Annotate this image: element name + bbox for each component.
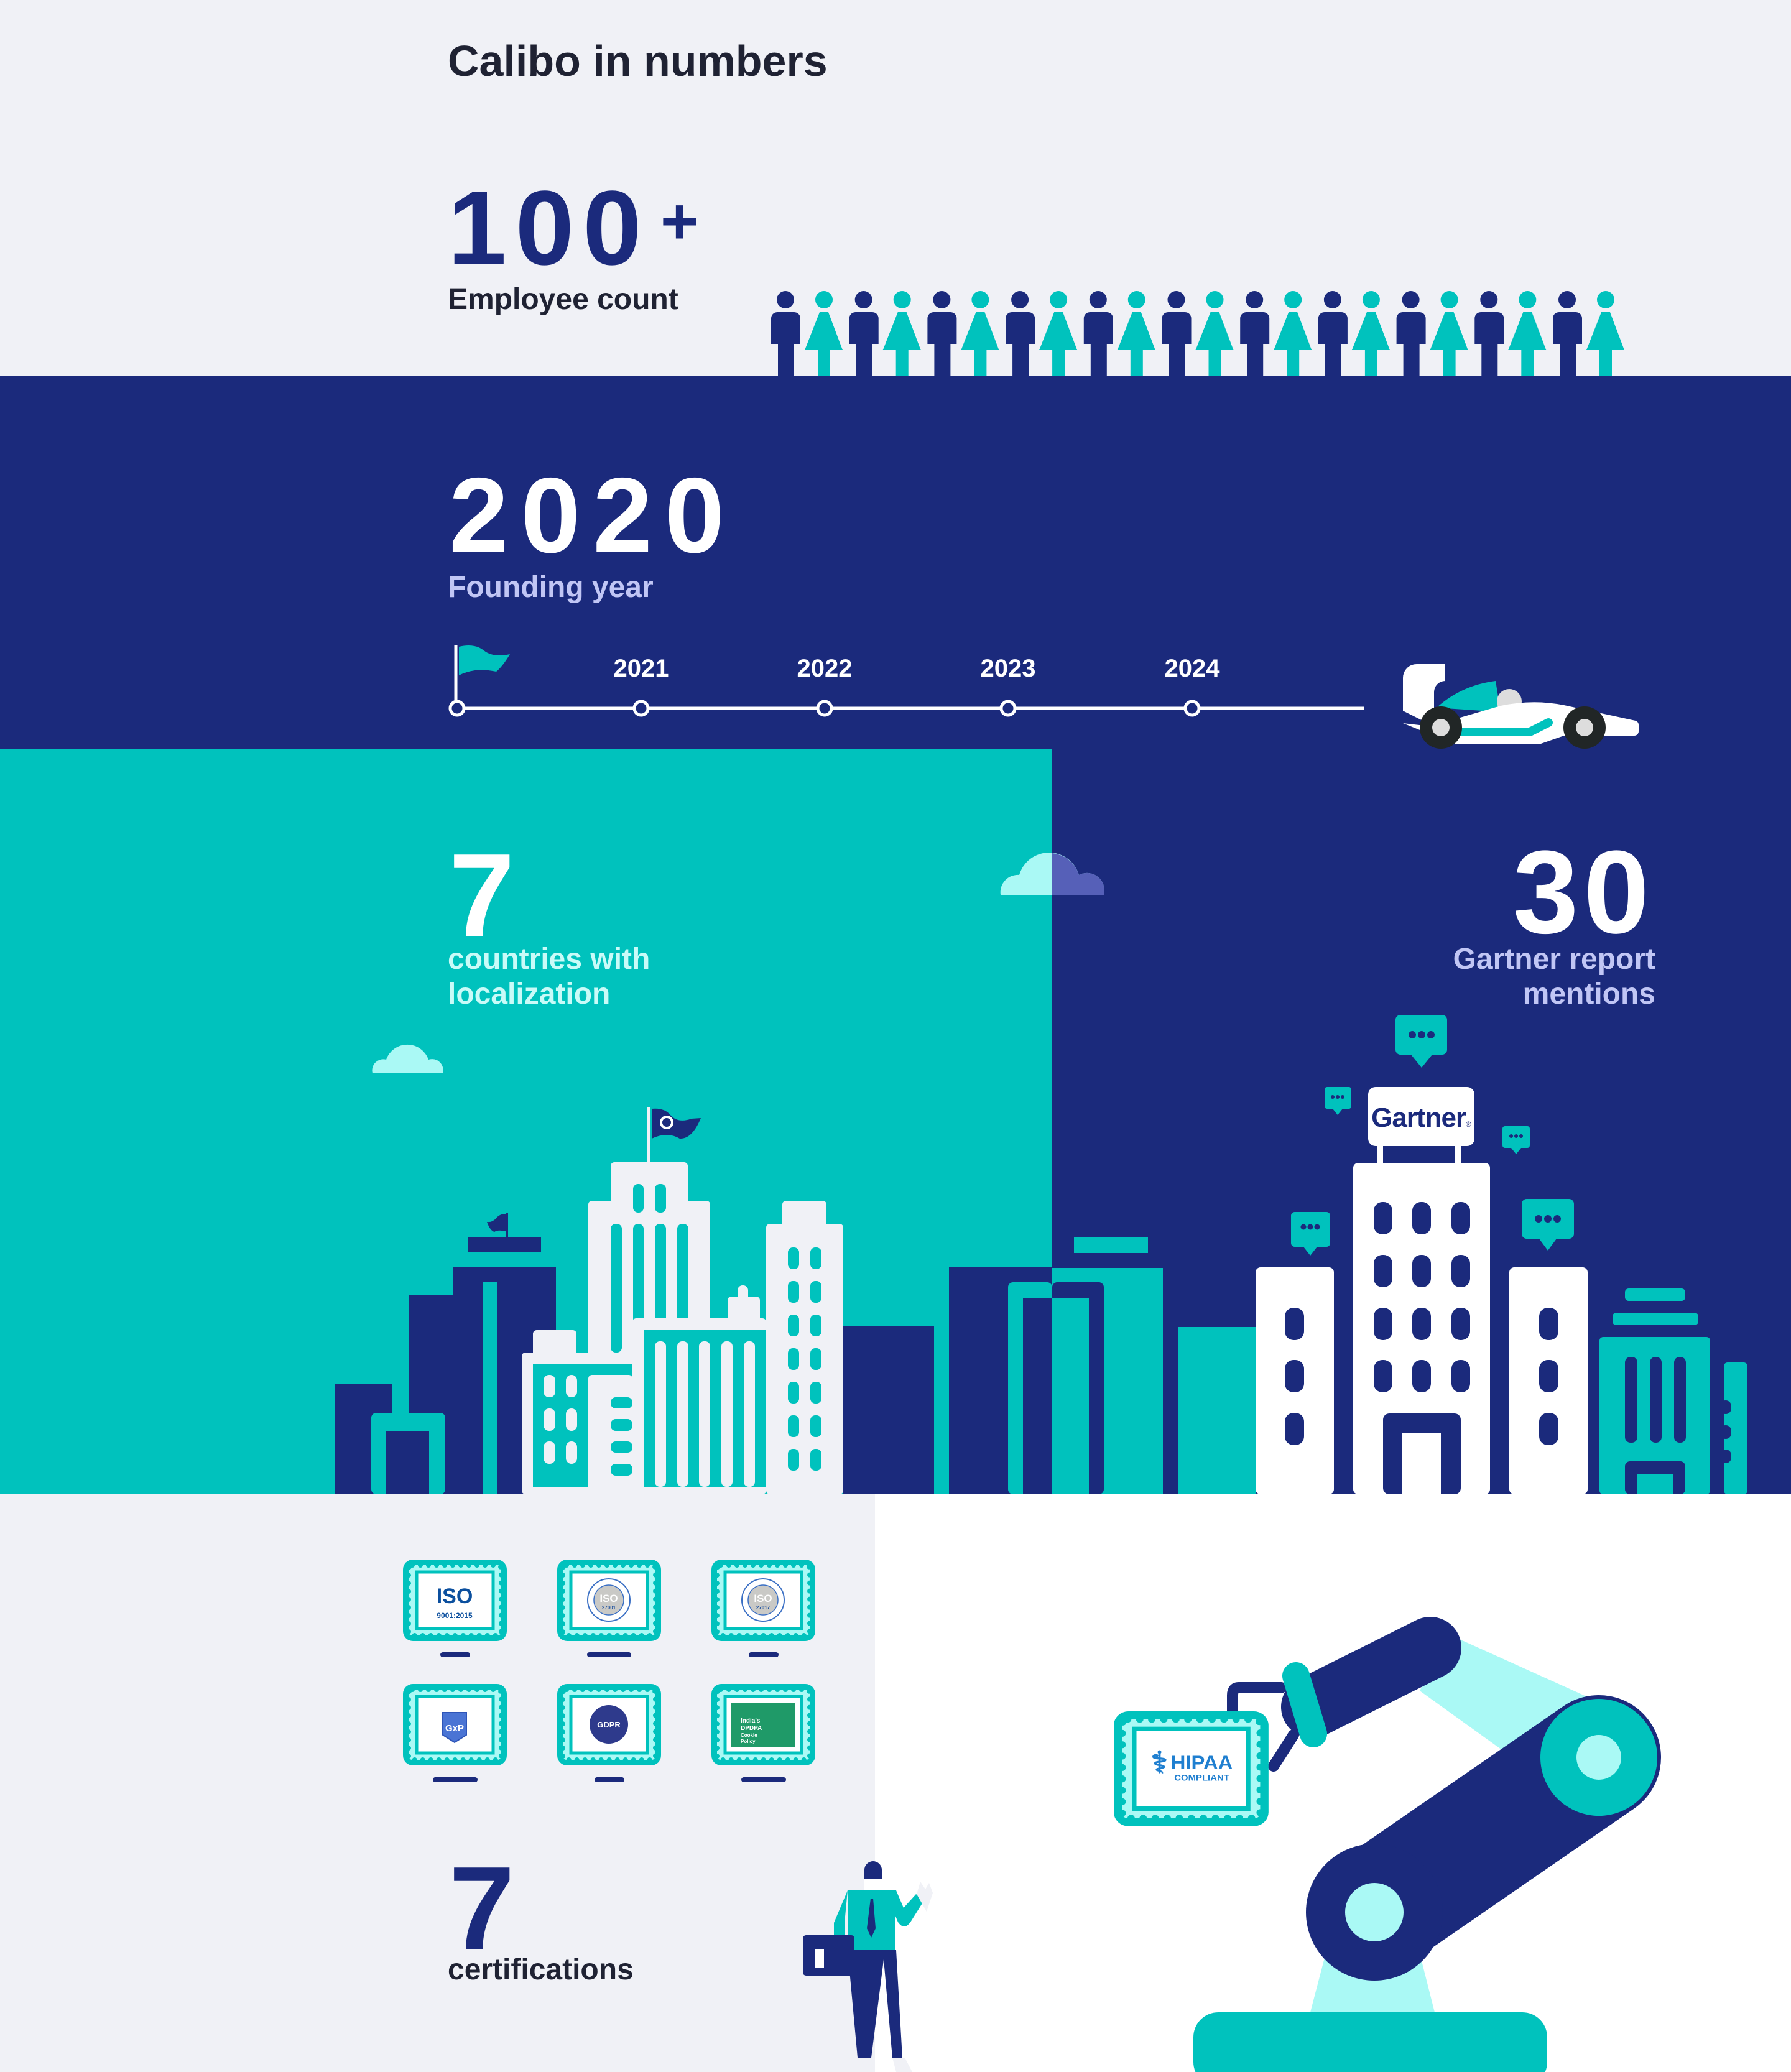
stamp: ISO 27001: 27001 bbox=[602, 1605, 616, 1611]
stamp: GDPR: GDPR bbox=[597, 1720, 621, 1729]
icon: cloud bbox=[1001, 853, 1104, 895]
stamp: GxP: GxP bbox=[445, 1723, 464, 1734]
stat: employee count: + bbox=[660, 185, 698, 258]
timeline: 2021 bbox=[614, 655, 669, 682]
title: Calibo in numbers bbox=[448, 37, 828, 85]
stamp: DPDPA: DPDPA bbox=[741, 1725, 762, 1732]
stamp: ISO 9001: ISO bbox=[437, 1584, 473, 1608]
city left bbox=[335, 1107, 1052, 1494]
stat: gartner mentions bbox=[1453, 826, 1655, 1011]
stat: certifications: 7 bbox=[449, 1843, 515, 1974]
certification stamps grid bbox=[403, 1560, 815, 1782]
stamp: ISO 27017: 27017 bbox=[756, 1605, 771, 1611]
stamp: GxP bbox=[403, 1684, 507, 1765]
stamp: DPDPA: India's bbox=[741, 1718, 761, 1724]
stamp: ISO 9001: 9001:2015 bbox=[437, 1611, 473, 1620]
stamp: DPDPA bbox=[711, 1684, 815, 1765]
icon: race car bbox=[1403, 664, 1639, 749]
stat: countries: 7 bbox=[449, 830, 515, 961]
stat: certifications bbox=[448, 1843, 634, 1986]
stat: founding year: 2020 bbox=[449, 456, 737, 575]
gartner sign: Gartner® bbox=[1371, 1103, 1471, 1133]
stamp: HIPAA bbox=[1114, 1711, 1269, 1826]
stamp: GDPR bbox=[557, 1684, 661, 1765]
stamp: DPDPA: Policy bbox=[741, 1739, 756, 1744]
stamp: HIPAA: ⚕ bbox=[1151, 1746, 1168, 1779]
stat: employee count: 100 bbox=[448, 169, 650, 287]
timeline: 2023 bbox=[981, 655, 1035, 682]
stamp: ISO 27017 bbox=[711, 1560, 815, 1641]
stat: founding year: Founding year bbox=[448, 571, 654, 604]
stat: countries: countries with bbox=[448, 943, 650, 976]
icon: flag bbox=[459, 645, 510, 675]
timeline: 2022 bbox=[797, 655, 852, 682]
people icons row bbox=[771, 291, 1624, 376]
stat: gartner mentions: mentions bbox=[1523, 978, 1655, 1011]
gartner sign bbox=[1368, 1087, 1474, 1146]
stat: employee count bbox=[448, 169, 698, 316]
stamp: ISO 27017: ISO bbox=[754, 1593, 772, 1604]
stat: countries bbox=[448, 830, 650, 1011]
stat: countries: localization bbox=[448, 978, 610, 1011]
stamp: HIPAA: HIPAA bbox=[1171, 1752, 1233, 1774]
stamp: ISO 9001 bbox=[403, 1560, 507, 1641]
timeline bbox=[450, 645, 1364, 715]
stat: employee count: Employee count bbox=[448, 283, 678, 316]
icon: cloud small bbox=[372, 1045, 443, 1073]
city right bbox=[1052, 1087, 1747, 1494]
stat: gartner mentions: 30 bbox=[1513, 826, 1654, 958]
stamp: ISO 27001 bbox=[557, 1560, 661, 1641]
stamp: DPDPA: Cookie bbox=[741, 1732, 757, 1738]
stamp: ISO 27001: ISO bbox=[599, 1593, 618, 1604]
stat: certifications: certifications bbox=[448, 1953, 634, 1986]
stamp: HIPAA: COMPLIANT bbox=[1174, 1774, 1229, 1783]
timeline: 2024 bbox=[1165, 655, 1220, 682]
stat: gartner mentions: Gartner report bbox=[1453, 943, 1655, 976]
illustration: robot arm with HIPAA stamp bbox=[1114, 1634, 1657, 2072]
speech bubbles bbox=[1291, 1015, 1574, 1256]
illustration: businessman bbox=[803, 1861, 933, 2072]
